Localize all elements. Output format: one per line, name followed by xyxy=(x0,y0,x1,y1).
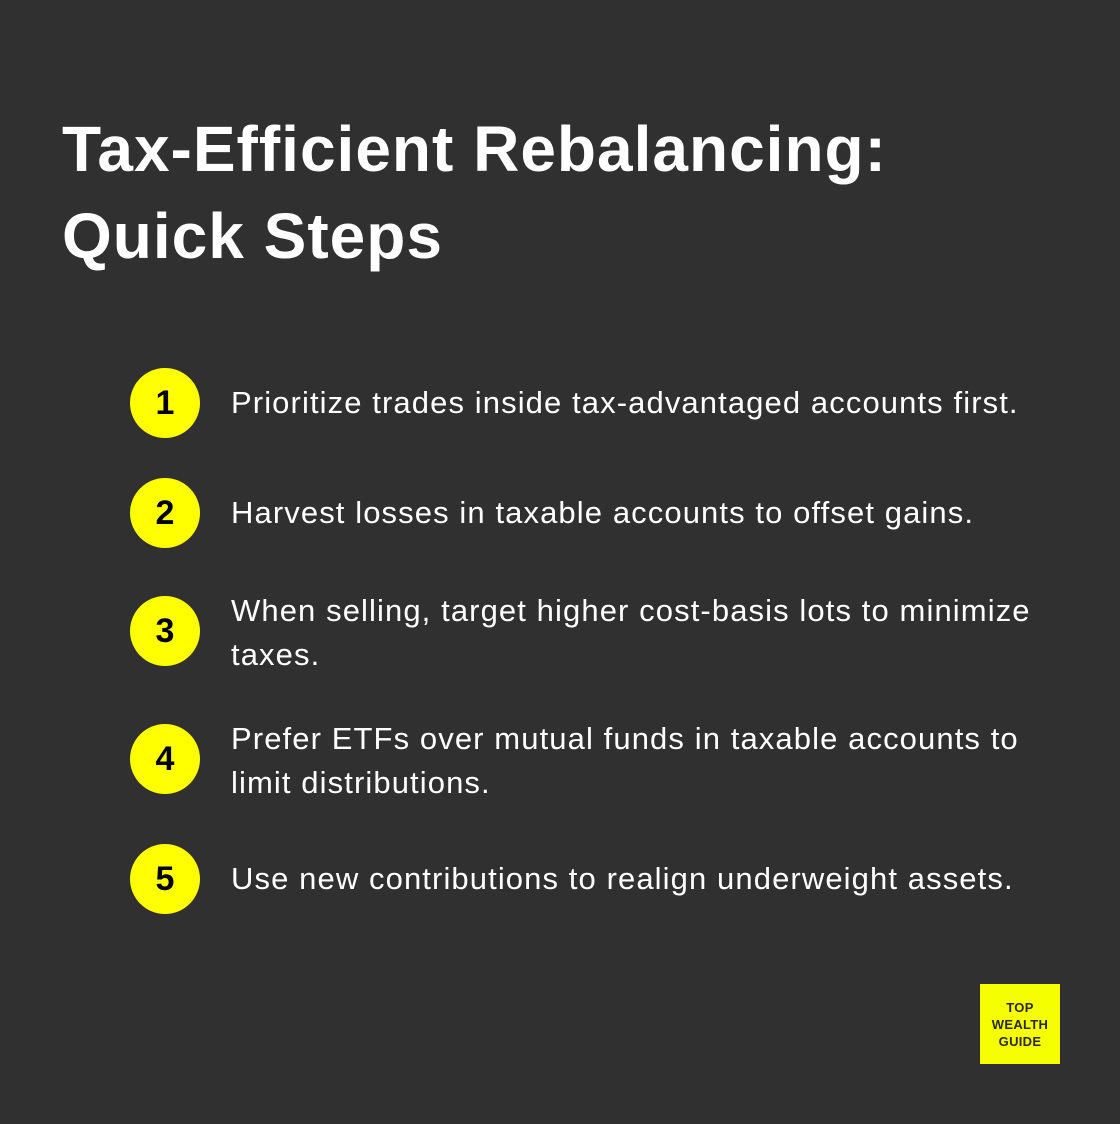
logo: WEALTH xyxy=(992,1016,1048,1032)
step 2: 2 xyxy=(156,494,174,532)
step 4: Prefer ETFs over mutual funds in taxable accounts to limit distributions. xyxy=(231,721,1019,800)
step 1: 1 xyxy=(156,384,174,422)
step 5: 5 xyxy=(156,860,174,898)
step 1 xyxy=(130,368,1019,438)
step 3: 3 xyxy=(156,612,174,650)
title: Quick Steps xyxy=(62,200,443,272)
title: Tax-Efficient Rebalancing: xyxy=(62,113,887,185)
step 2 xyxy=(130,478,974,548)
logo xyxy=(980,984,1060,1064)
step 5 xyxy=(130,844,1014,914)
step 4: 4 xyxy=(156,740,174,778)
step 3: When selling, target higher cost-basis lots to minimize taxes. xyxy=(231,593,1031,672)
step 2: Harvest losses in taxable accounts to offset gains. xyxy=(231,495,974,530)
logo: TOP xyxy=(1006,1000,1034,1014)
title xyxy=(62,113,887,272)
logo: GUIDE xyxy=(999,1034,1041,1048)
step 1: Prioritize trades inside tax-advantaged accounts first. xyxy=(231,385,1019,420)
step 5: Use new contributions to realign underweight assets. xyxy=(231,861,1014,896)
